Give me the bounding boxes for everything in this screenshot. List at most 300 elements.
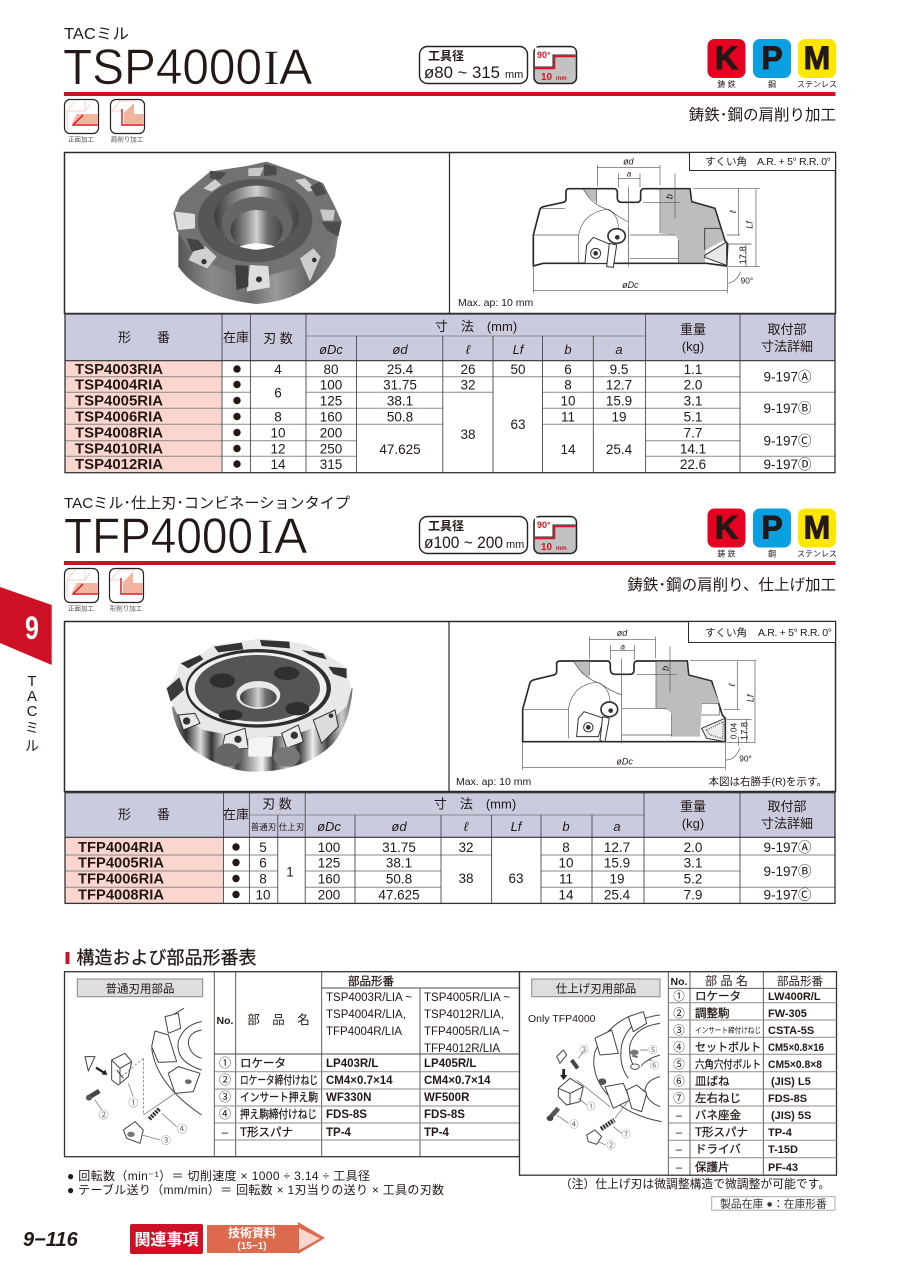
panel: standard edge parts table: TSP4003R/LIA ~ — [326, 992, 412, 1004]
table: TSP4000 specifications: 形 番 — [118, 330, 170, 345]
panel: standard edge parts table: WF330N — [326, 1092, 371, 1104]
diagram: TSP4000 cross-section: 90° — [741, 275, 753, 285]
panel: finishing edge parts table: FDS-8S — [768, 1093, 807, 1105]
rake angle note: A.R. + 5° R.R. 0° — [758, 627, 832, 639]
label: standard edge parts: 普通刃用部品 — [106, 982, 174, 996]
table: TSP4000 specifications: 22.6 — [680, 457, 706, 472]
panel: standard edge parts table: T形スパナ — [240, 1126, 293, 1139]
table: TSP4000 specifications: 19 — [611, 410, 627, 424]
panel: finishing edge parts table: 六角穴付ボルト — [695, 1058, 761, 1071]
panel: standard edge parts table: TSP4004R/LIA, — [326, 1009, 406, 1021]
panel: finishing edge parts table: CM5×0.8×8 — [768, 1059, 822, 1071]
table: TFP4000 specifications: 7.9 — [684, 888, 702, 902]
material badges K P M — [708, 508, 837, 558]
tool diameter badge: mm — [506, 539, 524, 551]
icons: machining types: 正面加工 — [68, 604, 94, 612]
table: TSP4000 specifications: 50.8 — [387, 410, 413, 424]
tool diameter badge: 工具径 — [428, 519, 464, 533]
panel: finishing edge parts table: ⑥ — [673, 1075, 685, 1088]
side tab: chapter 9 — [0, 587, 52, 754]
table: TFP4000 specifications: 5 — [259, 840, 267, 855]
panel: finishing edge parts table: 部品形番 — [777, 975, 823, 988]
diagram: TSP4000 cross-section: a — [627, 169, 632, 179]
table: TFP4000 specifications: 11 — [559, 872, 573, 886]
table: TFP4000 specifications: 2.0 — [684, 840, 702, 855]
diagram: finishing edge exploded view: ① — [587, 1102, 596, 1112]
depth of cut badge: 90 degree, 10 mm — [534, 46, 576, 84]
panel: standard edge parts table: FDS-8S — [326, 1109, 367, 1121]
material badges K P M: M — [804, 510, 830, 546]
table: TSP4000 specifications: 7.7 — [684, 426, 702, 440]
panel: standard edge parts table: WF500R — [424, 1092, 470, 1104]
table: TFP4000 specifications: ød — [391, 819, 407, 834]
section 1 application text: 鋳鉄･鋼の肩削り加工 — [689, 106, 836, 124]
material badges K P M: ステンレス — [797, 80, 837, 89]
panel: standard edge parts table: TFP4012R/LIA — [424, 1043, 500, 1055]
table: TSP4000 specifications: 10 — [560, 394, 576, 408]
diagram: TSP4000 cross-section: ød — [623, 157, 635, 167]
material badges K P M: 鋳 鉄 — [717, 548, 736, 558]
diagram: standard edge exploded view: ④ — [177, 1123, 187, 1135]
panel: standard edge parts table: TFP4005R/LIA ~ — [424, 1026, 510, 1038]
table: TSP4000 specifications: 80 — [323, 362, 339, 377]
section 2 red rule — [64, 561, 836, 565]
table: TSP4000 specifications: 47.625 — [379, 442, 421, 457]
table: TFP4000 specifications: 125 — [318, 856, 340, 870]
diagram: standard edge exploded view: ② — [99, 1109, 109, 1121]
arrow: technical data link: 技術資料 — [228, 1225, 276, 1240]
side tab: chapter 9: 9 — [25, 611, 39, 647]
table: TFP4000 specifications: 10 — [255, 888, 271, 902]
panel: standard edge parts table: ③ — [219, 1090, 231, 1104]
formulas: ● 回転数（min⁻¹）＝ 切削速度 × 1000 ÷ 3.14 ÷ 工具径 — [67, 1168, 370, 1183]
section 2 subtitle: TACミル･仕上刃･コンビネーションタイプ — [64, 495, 350, 512]
table: TSP4000 specifications: 寸 法 (mm) — [435, 319, 517, 334]
formulas: ● テーブル送り（mm/min）＝ 回転数 × 1刃当りの送り × 工具の刃数 — [67, 1182, 444, 1197]
table: TFP4000 specifications: 3.1 — [684, 856, 702, 870]
diagram: standard edge exploded view: ③ — [161, 1135, 171, 1147]
table: TFP4000 specifications: 63 — [508, 871, 524, 886]
panel: standard edge parts table: LP403R/L — [326, 1058, 378, 1070]
table: TSP4000 specifications — [65, 314, 835, 473]
table: TSP4000 specifications: 重量 — [680, 322, 706, 337]
rake angle note — [688, 622, 836, 642]
table: TFP4000 specifications: 取付部 — [767, 799, 807, 814]
panel: finishing edge parts table: No. — [671, 976, 688, 988]
table: TFP4000 specifications: 50.8 — [386, 872, 412, 886]
table: TSP4000 specifications: 刃 数 — [263, 331, 293, 346]
table: TSP4000 specifications: 2.0 — [684, 378, 702, 392]
table: TFP4000 specifications: 刃 数 — [262, 796, 292, 812]
panel: finishing edge parts table: ② — [673, 1007, 685, 1020]
rake angle note — [690, 152, 836, 170]
panel: standard edge parts table: – — [222, 1125, 229, 1139]
diagram: finishing edge exploded view: ⑥ — [650, 1060, 659, 1070]
table: TSP4000 specifications: 9-197Ⓑ — [763, 401, 812, 416]
footnote: fine adjustment: （注）仕上げ刃は微調整構造で微調整が可能です。 — [560, 1177, 830, 1191]
legend: stock: 製品在庫 ●：在庫形番 — [720, 1196, 827, 1210]
table: TFP4000 specifications: 寸法詳細 — [761, 816, 813, 831]
diagram: TFP4000 cross-section: 90° — [739, 754, 752, 764]
table: TFP4000 specifications: 形 番 — [118, 807, 170, 822]
label: standard edge parts — [77, 979, 203, 997]
icons: machining types — [64, 100, 144, 144]
table: TSP4000 specifications: 12.7 — [606, 378, 632, 392]
tool diameter badge — [420, 46, 528, 84]
table: TFP4000 specifications: 15.9 — [604, 856, 630, 870]
diagram: finishing edge exploded view: ③ — [580, 1045, 589, 1055]
table: TFP4000 specifications: 100 — [318, 840, 340, 855]
table: TSP4000 specifications: 12 — [270, 442, 286, 456]
panel: standard edge parts table: ④ — [219, 1107, 231, 1121]
depth of cut badge: 90 degree, 10 mm: 10 — [541, 542, 553, 553]
table: TFP4000 specifications: 普通刃 — [251, 822, 276, 832]
material badges K P M: P — [761, 510, 783, 546]
panel: standard edge parts table: インサート押え駒 — [240, 1090, 318, 1104]
table: TSP4000 specifications: 38.1 — [387, 394, 413, 408]
material badges K P M — [708, 39, 837, 89]
table: TSP4000 specifications: 10 — [270, 426, 286, 440]
panel: standard edge parts table: No. — [217, 1015, 234, 1027]
table: TSP4000 specifications: 26 — [460, 362, 476, 377]
rake angle note: すくい角 — [705, 626, 747, 639]
panel: finishing edge parts table: T形スパナ — [695, 1126, 748, 1139]
diagram: TSP4000 cross-section: b — [665, 194, 675, 199]
table: TSP4000 specifications: 25.4 — [606, 442, 633, 457]
table: TSP4000 specifications: 4 — [274, 362, 282, 377]
table: TFP4000 specifications: 9-197Ⓑ — [763, 864, 812, 879]
diagram: TSP4000 cross-section: øDc — [622, 280, 639, 290]
panel: finishing edge parts table: セットボルト — [695, 1041, 761, 1054]
formulas — [67, 1168, 444, 1197]
table: TFP4000 specifications: 8 — [259, 872, 267, 886]
section 2 title: A — [274, 508, 308, 564]
table: TFP4000 specifications: TFP4008RIA — [78, 886, 164, 904]
icons: machining types — [64, 568, 144, 612]
table: TFP4000 specifications: 19 — [609, 872, 625, 886]
panel: standard edge parts table: TSP4005R/LIA ~ — [424, 992, 510, 1004]
table: TSP4000 specifications: ℓ — [466, 342, 471, 357]
panel: finishing edge parts table: (JIS) 5S — [771, 1110, 811, 1122]
material badges K P M: 鋼 — [768, 79, 776, 89]
related items label — [130, 1224, 203, 1254]
table: TFP4000 specifications: Lf — [511, 819, 523, 834]
table: TSP4000 specifications: 在庫 — [223, 330, 249, 345]
panel: standard edge parts table — [64, 972, 520, 1157]
table: TFP4000 specifications: 200 — [318, 888, 340, 902]
label: finishing edge parts: 仕上げ刃用部品 — [556, 982, 636, 996]
panel: standard edge parts table: 部品形番 — [348, 975, 394, 988]
side tab: chapter 9: ル — [25, 738, 39, 754]
table: TSP4000 specifications: b — [564, 342, 572, 357]
side tab: chapter 9: ミ — [25, 720, 39, 736]
panel: finishing edge parts table: – — [676, 1127, 683, 1139]
tool diameter badge: mm — [505, 69, 523, 81]
table: TFP4000 specifications: (kg) — [682, 816, 704, 831]
table: TSP4000 specifications: 125 — [320, 394, 342, 408]
table: TSP4000 specifications: 315 — [320, 457, 342, 472]
section 1 title: I — [263, 39, 280, 95]
table: TFP4000 specifications: 25.4 — [604, 888, 631, 902]
table: TFP4000 specifications: TFP4004RIA — [78, 839, 164, 856]
table: TSP4000 specifications: øDc — [319, 342, 343, 357]
side tab: chapter 9: C — [27, 703, 38, 720]
table: TSP4000 specifications: 9.5 — [610, 362, 628, 377]
table: TSP4000 specifications: 250 — [320, 442, 342, 456]
panel: finishing edge parts table: インサート締付けねじ — [695, 1025, 761, 1035]
diagram: TFP4000 cross-section: a — [620, 641, 625, 651]
max ap note: Max. ap: 10 mm — [458, 297, 534, 309]
table: TSP4000 specifications: 9-197Ⓒ — [763, 434, 812, 448]
panel: finishing edge parts table: – — [676, 1144, 683, 1156]
diagram: finishing edge exploded view: ⑤ — [648, 1045, 657, 1055]
section 2 title: I — [257, 508, 274, 564]
tool diameter badge: 工具径 — [428, 49, 464, 63]
diagram: finishing edge exploded view: ⑦ — [621, 1129, 630, 1139]
panel: finishing edge parts table: ① — [673, 990, 685, 1003]
heading: structure and parts: 構造および部品形番表 — [76, 948, 256, 968]
panel: standard edge parts table: ロケータ — [240, 1057, 286, 1070]
table: TFP4000 specifications: 6 — [259, 856, 267, 870]
diagram: TSP4000 cross-section — [533, 157, 760, 293]
table: TFP4000 specifications: TFP4005RIA — [78, 854, 164, 872]
panel: finishing edge parts table: FW-305 — [768, 1008, 807, 1020]
section 1 title: TSP4000 — [63, 39, 262, 95]
diagram: finishing edge exploded view — [547, 1012, 662, 1150]
table: TSP4000 specifications: 100 — [320, 378, 342, 392]
label: finishing edge parts — [532, 979, 660, 997]
table: TSP4000 specifications: 6 — [274, 386, 282, 400]
table: TFP4000 specifications: 14 — [558, 888, 574, 902]
rake angle note: すくい角 — [705, 155, 747, 168]
panel: finishing edge parts table: ⑤ — [673, 1058, 685, 1071]
diagram: TSP4000 cross-section: 17.8 — [738, 246, 748, 264]
section 1 subtitle: TACミル — [64, 26, 129, 43]
table: TSP4000 specifications: TSP4003RIA — [75, 361, 163, 378]
table: TSP4000 specifications: 11 — [561, 410, 575, 424]
panel: standard edge parts table: 部 品 名 — [247, 1012, 310, 1027]
table: TSP4000 specifications: 15.9 — [606, 394, 632, 408]
table: TFP4000 specifications: 仕上刃 — [279, 822, 304, 832]
table: TFP4000 specifications: øDc — [317, 819, 341, 834]
table: TSP4000 specifications: 14 — [270, 457, 286, 472]
material badges K P M: ステンレス — [797, 550, 837, 558]
table: TSP4000 specifications: (kg) — [682, 339, 704, 354]
depth of cut badge: 90 degree, 10 mm: mm — [556, 76, 567, 82]
table: TSP4000 specifications: TSP4004RIA — [75, 376, 163, 394]
section 1 red rule — [64, 92, 836, 96]
table: TSP4000 specifications: 160 — [320, 410, 342, 424]
table: TFP4000 specifications: 38 — [458, 871, 474, 886]
panel: finishing edge parts table: ③ — [673, 1024, 685, 1037]
panel: finishing edge parts table: CM5×0.8×16 — [768, 1042, 824, 1054]
page number: 9−116 — [23, 1229, 79, 1251]
panel: standard edge parts table: FDS-8S — [424, 1109, 465, 1121]
panel: finishing edge parts table: (JIS) L5 — [771, 1076, 811, 1088]
section 2 application text: 鋳鉄･鋼の肩削り、仕上げ加工 — [627, 576, 836, 594]
table: TFP4000 specifications: a — [613, 819, 621, 834]
panel: section 1 figure frame — [64, 152, 836, 314]
panel: finishing edge parts table: バネ座金 — [695, 1109, 741, 1122]
tool diameter badge: ø80 ~ 315 — [424, 63, 500, 82]
diagram: TFP4000 cross-section: 17.8 — [739, 722, 749, 740]
table: TSP4000 specifications: 1.1 — [684, 362, 702, 377]
diagram: TFP4000 cross-section — [523, 628, 757, 770]
table: TSP4000 specifications: 8 — [564, 378, 572, 392]
max ap note: Max. ap: 10 mm — [456, 776, 532, 788]
diagram: TFP4000 cross-section: øDc — [616, 757, 633, 767]
table: TSP4000 specifications: 寸法詳細 — [761, 339, 813, 354]
table: TSP4000 specifications: 6 — [564, 362, 572, 377]
arrow: technical data link — [207, 1222, 325, 1254]
table: TSP4000 specifications: TSP4008RIA — [75, 424, 163, 442]
material badges K P M: K — [715, 510, 738, 546]
table: TSP4000 specifications: 8 — [274, 410, 282, 424]
diagram: TFP4000 cross-section: ød — [617, 628, 628, 638]
icons: machining types: 形削り加工 — [110, 604, 143, 612]
table: TSP4000 specifications: 取付部 — [767, 322, 807, 337]
table: TSP4000 specifications: 63 — [510, 417, 526, 432]
panel: finishing edge parts table: ⑦ — [673, 1092, 685, 1105]
depth of cut badge: 90 degree, 10 mm: mm — [556, 546, 567, 552]
table: TFP4000 specifications: ℓ — [464, 819, 469, 834]
panel: finishing edge parts table: TP-4 — [768, 1127, 793, 1139]
panel: finishing edge parts table: 皿ばね — [695, 1075, 730, 1088]
panel: standard edge parts table: ロケータ締付けねじ — [240, 1073, 318, 1087]
table: TFP4000 specifications: 9-197Ⓒ — [763, 888, 812, 902]
table: TSP4000 specifications: 31.75 — [383, 378, 417, 392]
panel: finishing edge parts table: CSTA-5S — [768, 1025, 814, 1037]
diagram: TFP4000 cross-section: Lf — [745, 693, 755, 702]
section 2 title: TFP4000 — [64, 508, 253, 564]
diagram: TFP4000 cross-section: b — [661, 666, 671, 671]
table: TSP4000 specifications: 5.1 — [684, 410, 702, 424]
side tab: chapter 9: A — [27, 688, 37, 705]
table: TFP4000 specifications: 重量 — [680, 799, 706, 814]
depth of cut badge: 90 degree, 10 mm: 90° — [537, 520, 551, 530]
panel: standard edge parts table: TP-4 — [326, 1127, 352, 1139]
table: TFP4000 specifications: 1 — [286, 865, 294, 880]
table: TFP4000 specifications: 47.625 — [378, 888, 420, 902]
table: TFP4000 specifications: 12.7 — [604, 840, 630, 855]
table: TSP4000 specifications: 3.1 — [684, 394, 702, 408]
table: TSP4000 specifications: 9-197Ⓓ — [763, 457, 812, 472]
diagram: TFP4000 cross-section: ℓ — [727, 683, 737, 687]
panel: finishing edge parts table: 保護片 — [695, 1160, 730, 1174]
table: TFP4000 specifications — [65, 793, 835, 904]
icons: machining types: 正面加工 — [68, 134, 94, 144]
material badges K P M: M — [804, 40, 830, 76]
table: TFP4000 specifications: 5.2 — [684, 872, 702, 886]
diagram: TFP4000 cross-section: 0.04 — [729, 723, 739, 739]
depth of cut badge: 90 degree, 10 mm — [534, 516, 576, 554]
photo: TSP4000 cutter — [173, 162, 342, 304]
photo: TFP4000 cutter — [166, 638, 353, 772]
panel: standard edge parts table: CM4×0.7×14 — [326, 1075, 393, 1087]
panel: finishing edge parts table: 左右ねじ — [695, 1091, 741, 1105]
panel: standard edge parts table: CM4×0.7×14 — [424, 1075, 491, 1087]
table: TSP4000 specifications: 14.1 — [680, 442, 706, 456]
icons: machining types: 肩削り加工 — [111, 134, 144, 144]
table: TFP4000 specifications: 9-197Ⓐ — [763, 840, 812, 855]
table: TSP4000 specifications: TSP4010RIA — [75, 440, 163, 458]
diagram: standard edge exploded view: ① — [128, 1097, 138, 1109]
panel: finishing edge parts table: – — [676, 1162, 683, 1174]
panel: standard edge parts table: ② — [219, 1073, 231, 1087]
diagram: standard edge exploded view — [85, 1008, 202, 1147]
rake angle note: A.R. + 5° R.R. 0° — [757, 156, 831, 168]
panel: finishing edge parts table: T-15D — [768, 1144, 798, 1156]
diagram: finishing edge exploded view: ② — [606, 1140, 615, 1150]
table: TFP4000 specifications: 8 — [562, 840, 570, 855]
table: TSP4000 specifications: 38 — [460, 427, 476, 442]
table: TSP4000 specifications: a — [615, 342, 623, 357]
depth of cut badge: 90 degree, 10 mm: 10 — [541, 72, 553, 83]
panel: finishing edge parts table: ロケータ — [695, 990, 741, 1003]
table: TSP4000 specifications: 200 — [320, 426, 342, 440]
panel: standard edge parts table: TSP4012R/LIA, — [424, 1009, 504, 1021]
table: TSP4000 specifications: Lf — [513, 342, 525, 357]
diagram: TSP4000 cross-section: ℓ — [728, 210, 738, 214]
table: TFP4000 specifications: 10 — [558, 856, 574, 870]
diagram: TSP4000 cross-section: Lf — [745, 220, 755, 229]
panel: finishing edge parts table: ④ — [673, 1041, 685, 1054]
table: TFP4000 specifications: b — [562, 819, 570, 834]
table: TFP4000 specifications: 31.75 — [382, 840, 416, 855]
right-hand note: 本図は右勝手(R)を示す。 — [708, 775, 827, 788]
table: TFP4000 specifications: 在庫 — [223, 807, 249, 822]
panel: finishing edge parts table — [520, 972, 836, 1175]
material badges K P M: 鋼 — [768, 548, 776, 558]
table: TSP4000 specifications: 14 — [560, 442, 576, 457]
panel: standard edge parts table: LP405R/L — [424, 1058, 476, 1070]
panel: finishing edge parts table: PF-43 — [768, 1162, 798, 1174]
arrow: technical data link: (15−1) — [237, 1241, 267, 1252]
table: TSP4000 specifications: 50 — [510, 362, 526, 377]
panel: finishing edge parts table: 部 品 名 — [705, 973, 748, 988]
panel: finishing edge parts table: 調整駒 — [695, 1006, 730, 1020]
material badges K P M: P — [761, 40, 783, 76]
diagram: finishing edge exploded view: ④ — [570, 1119, 579, 1129]
table: TSP4000 specifications: 32 — [460, 378, 476, 392]
panel: finishing edge parts table: Only TFP4000 — [528, 1013, 596, 1025]
table: TFP4000 specifications: 38.1 — [386, 856, 412, 870]
panel: finishing edge parts table: ドライバ — [695, 1143, 741, 1156]
material badges K P M: 鋳 鉄 — [717, 79, 736, 89]
panel: standard edge parts table: TP-4 — [424, 1127, 450, 1139]
table: TSP4000 specifications: TSP4005RIA — [75, 392, 163, 410]
table: TFP4000 specifications: 160 — [318, 872, 340, 886]
table: TSP4000 specifications: TSP4006RIA — [75, 408, 163, 426]
panel: standard edge parts table: 押え駒締付けねじ — [240, 1107, 317, 1121]
panel: section 2 figure frame — [64, 622, 836, 792]
table: TFP4000 specifications: 寸 法 (mm) — [434, 796, 516, 812]
tool diameter badge — [420, 516, 528, 554]
related items label: 関連事項 — [134, 1230, 199, 1249]
table: TSP4000 specifications: TSP4012RIA — [75, 456, 163, 473]
material badges K P M: K — [715, 40, 738, 76]
section 1 title: A — [279, 39, 313, 95]
table: TFP4000 specifications: 32 — [458, 840, 474, 855]
table: TFP4000 specifications: TFP4006RIA — [78, 870, 164, 888]
table: TSP4000 specifications: ød — [392, 342, 408, 357]
panel: standard edge parts table: ① — [219, 1056, 231, 1070]
table: TSP4000 specifications: 9-197Ⓐ — [763, 370, 812, 384]
panel: finishing edge parts table: – — [676, 1110, 683, 1122]
panel: standard edge parts table: TFP4004R/LIA — [326, 1026, 402, 1038]
side tab: chapter 9: T — [27, 673, 37, 690]
table: TSP4000 specifications: 25.4 — [387, 362, 414, 377]
